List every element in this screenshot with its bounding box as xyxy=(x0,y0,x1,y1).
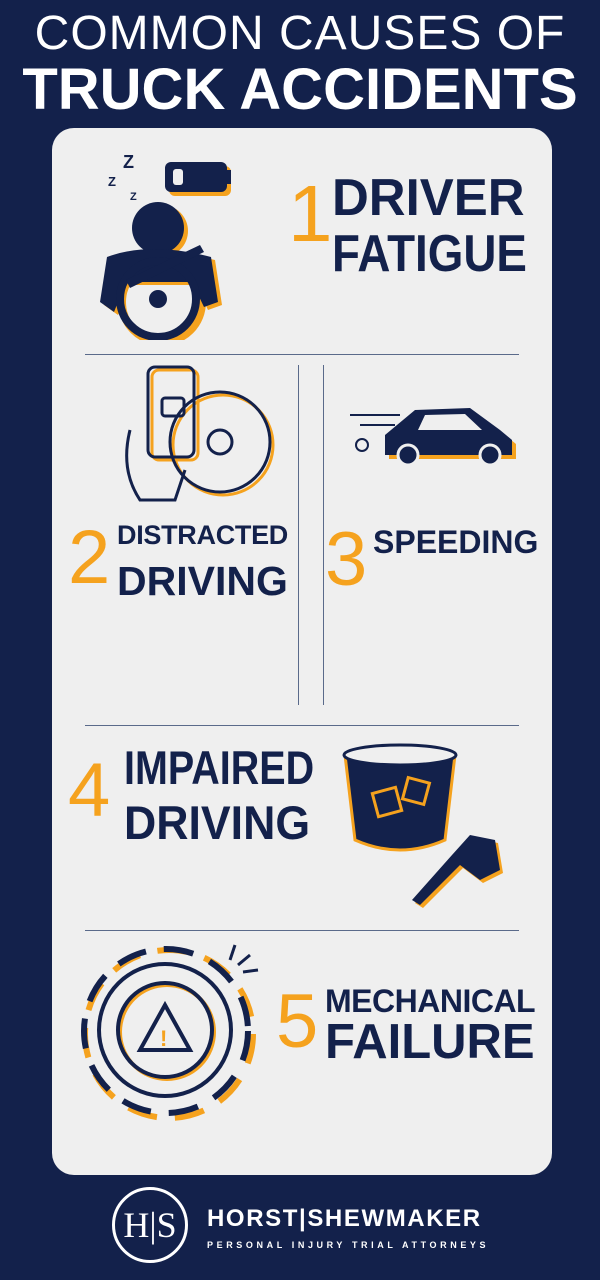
logo xyxy=(112,1187,489,1263)
logo: HORST|SHEWMAKER xyxy=(207,1205,482,1232)
heading: 1 driver fatigue: FATIGUE xyxy=(332,225,527,283)
icon: sleepy driver: Z xyxy=(123,152,134,172)
title: COMMON CAUSES OF xyxy=(35,7,565,60)
heading: 1 driver fatigue xyxy=(288,169,527,283)
heading: 1 driver fatigue: 1 xyxy=(288,169,332,258)
heading: 2 distracted driving xyxy=(68,515,288,604)
heading: 2 distracted driving: DISTRACTED xyxy=(117,520,288,550)
heading: 1 driver fatigue: DRIVER xyxy=(332,169,525,227)
heading: 5 mechanical failure: MECHANICAL xyxy=(325,983,535,1019)
icon: speeding car xyxy=(350,408,516,464)
heading: 5 mechanical failure: 5 xyxy=(276,979,318,1064)
heading: 4 impaired driving: 4 xyxy=(68,748,110,833)
logo: PERSONAL INJURY TRIAL ATTORNEYS xyxy=(207,1240,489,1250)
title: TRUCK ACCIDENTS xyxy=(22,57,578,122)
heading: 2 distracted driving: 2 xyxy=(68,515,110,600)
heading: 4 impaired driving: DRIVING xyxy=(124,796,310,849)
heading: 5 mechanical failure: FAILURE xyxy=(325,1015,535,1069)
icon: glass and key xyxy=(342,744,503,908)
heading: 5 mechanical failure xyxy=(276,979,535,1069)
icon: sleepy driver: Z xyxy=(130,191,137,203)
heading: 2 distracted driving: DRIVING xyxy=(117,558,288,604)
icon: sleepy driver xyxy=(100,152,231,340)
heading: 3 speeding xyxy=(325,517,538,602)
logo: H|S xyxy=(123,1205,177,1245)
heading: 3 speeding: SPEEDING xyxy=(373,524,538,560)
heading: 4 impaired driving: IMPAIRED xyxy=(124,741,314,794)
icon: gear with warning: ! xyxy=(160,1026,167,1051)
icon: phone and wheel xyxy=(125,366,274,502)
icon: sleepy driver: Z xyxy=(108,174,116,189)
panel: causes xyxy=(52,128,552,1175)
heading: 3 speeding: 3 xyxy=(325,517,367,602)
heading: 4 impaired driving xyxy=(68,741,314,849)
title xyxy=(22,7,578,122)
icon: gear with warning xyxy=(81,944,258,1121)
